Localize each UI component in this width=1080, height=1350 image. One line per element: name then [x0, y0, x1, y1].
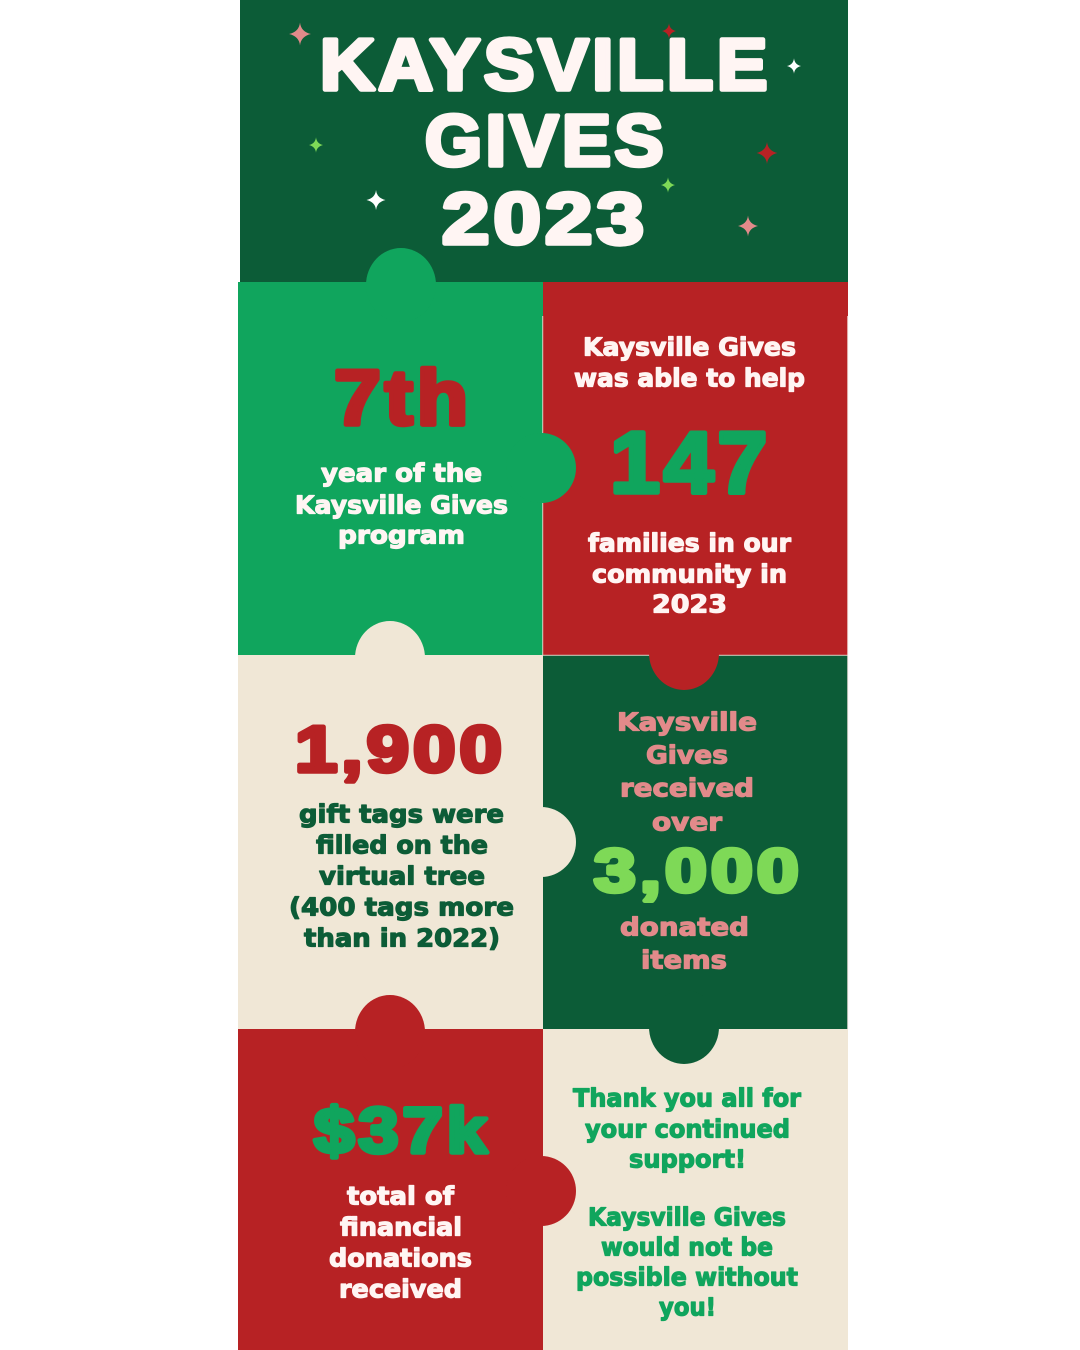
text: thank you — [573, 1083, 802, 1321]
text: 7th year: program — [338, 520, 465, 549]
text: 3,000 items: 3,000 — [594, 838, 803, 904]
text: thank you: support! — [629, 1144, 746, 1173]
text: thank you: you! — [659, 1292, 716, 1321]
text: 1,900 tags: (400 tags more — [289, 892, 514, 921]
panel: $37k — [238, 995, 543, 1350]
text: 3,000 items: received — [620, 773, 754, 802]
text: 7th year: Kaysville Gives — [295, 490, 508, 519]
text: $37k: received — [339, 1274, 462, 1303]
icon: red sparkle right — [757, 142, 777, 164]
text: thank you: possible without — [576, 1262, 798, 1291]
text: thank you: Kaysville Gives — [588, 1202, 786, 1231]
text: 3,000 items: Kaysville — [617, 707, 757, 736]
text: 147 families: 147 — [610, 414, 771, 512]
panel: header — [240, 0, 848, 283]
title — [320, 26, 771, 260]
panel: 3,000 items — [543, 655, 848, 1029]
text: thank you: would not be — [601, 1232, 773, 1261]
text: thank you: Thank you all for — [573, 1083, 802, 1112]
panel: 7th year — [238, 248, 543, 655]
icon: pink sparkle — [289, 22, 311, 46]
text: 3,000 items: Gives — [646, 740, 728, 769]
text: 147 families: 2023 — [652, 589, 727, 618]
puzzle knobs — [506, 433, 719, 1226]
text: $37k: total of — [347, 1181, 455, 1210]
text: 3,000 items: over — [652, 807, 723, 836]
panel: thank you — [543, 1029, 848, 1350]
text: 1,900 tags: than in 2022) — [304, 923, 500, 952]
title: KAYSVILLE — [320, 26, 771, 106]
icon: green sparkle right — [661, 177, 675, 193]
text: 1,900 tags: virtual tree — [319, 861, 485, 890]
text: 1,900 tags: 1,900 — [295, 712, 506, 786]
icon: white sparkle right — [787, 58, 801, 74]
text: 147 families: community in — [592, 559, 787, 588]
icon: white sparkle bottom — [366, 190, 386, 210]
text: 3,000 items — [594, 707, 803, 974]
text: 147 families — [574, 332, 805, 618]
text: $37k — [314, 1094, 491, 1303]
text: 7th year: 7th — [334, 354, 472, 442]
text: 147 families: was able to help — [574, 363, 805, 392]
icon: pink sparkle bottom — [738, 216, 758, 236]
panel: 1,900 tags — [238, 621, 543, 1029]
text: $37k: $37k — [314, 1094, 491, 1166]
icon: red sparkle top — [662, 23, 676, 39]
text: 1,900 tags: gift tags were — [299, 799, 504, 828]
text: 1,900 tags — [289, 712, 514, 952]
icon: green sparkle left — [309, 137, 323, 153]
panel: 147 families — [543, 282, 848, 655]
text: 7th year: year of the — [321, 458, 482, 487]
text: 7th year — [295, 354, 508, 549]
title: GIVES — [425, 102, 667, 182]
text: 3,000 items: donated — [620, 912, 749, 941]
title: 2023 — [442, 180, 648, 260]
text: thank you: your continued — [585, 1114, 790, 1143]
text: $37k: donations — [329, 1243, 472, 1272]
text: 147 families: families in our — [588, 528, 792, 557]
text: 1,900 tags: filled on the — [316, 830, 488, 859]
text: $37k: financial — [340, 1212, 462, 1241]
text: 3,000 items: items — [641, 945, 727, 974]
text: 147 families: Kaysville Gives — [583, 332, 796, 361]
